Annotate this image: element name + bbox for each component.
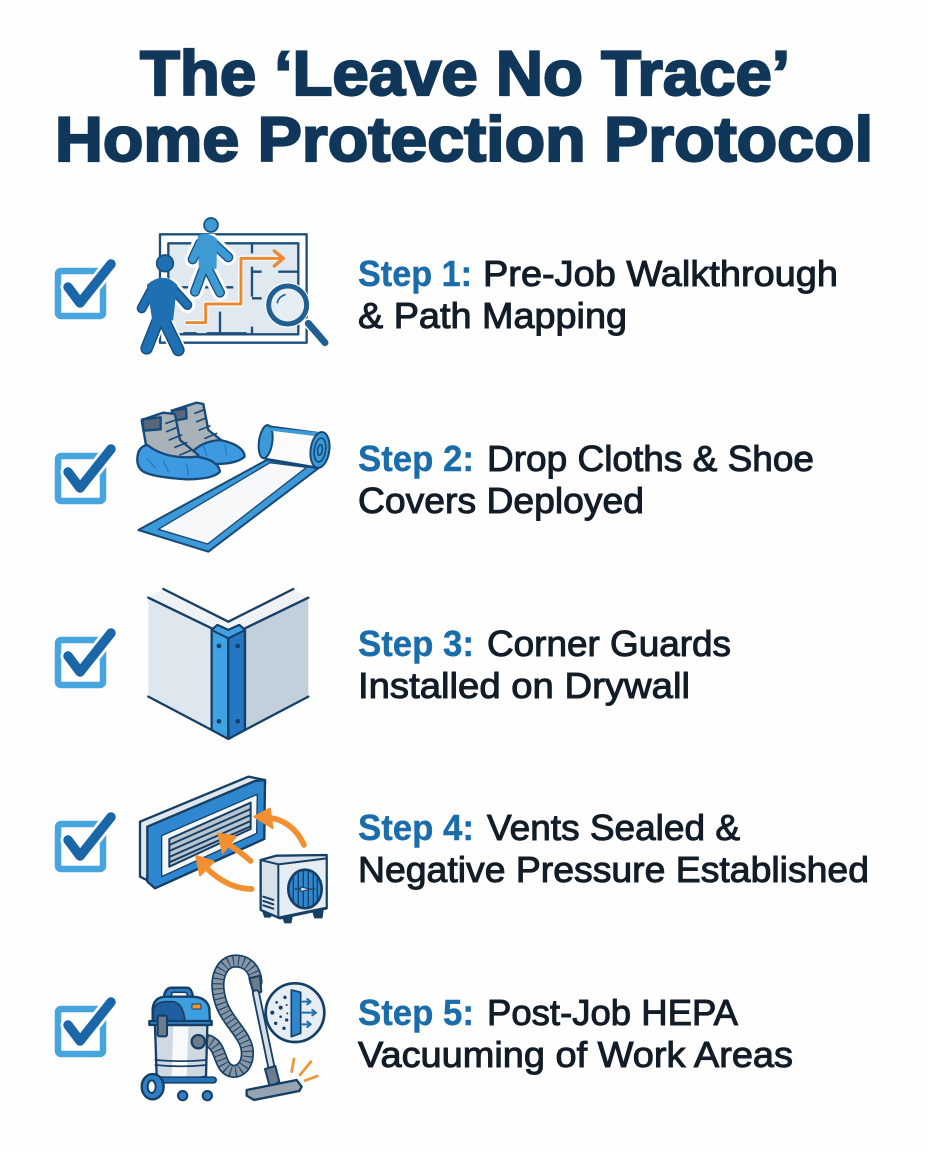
step 2 text: Step 2:	[358, 438, 474, 479]
step 3 row	[58, 589, 731, 739]
icon: shoe covers and drop cloth roll	[137, 403, 332, 552]
step 4 text: Vents Sealed &	[487, 807, 740, 848]
step 1 text: Pre-Job Walkthrough	[483, 253, 838, 294]
step 5 text	[358, 992, 793, 1075]
step 2 text: Drop Cloths & Shoe	[487, 438, 814, 479]
step 3 text: Corner Guards	[487, 623, 731, 664]
icon: checkbox step 3	[58, 633, 111, 685]
icon: walkthrough floor plan	[142, 218, 325, 350]
icon: checkbox step 5	[58, 1002, 111, 1054]
title: Home Protection Protocol	[55, 105, 873, 175]
step 2 text: Covers Deployed	[358, 480, 644, 521]
step 2 row	[58, 403, 814, 552]
icon: sealed vent and negative air machine	[140, 777, 327, 922]
title: The ‘Leave No Trace’	[140, 39, 790, 109]
step 3 text: Installed on Drywall	[358, 665, 690, 706]
step 5 text: Step 5:	[358, 992, 474, 1033]
step 1 text: & Path Mapping	[358, 295, 627, 336]
step 2 text	[358, 438, 814, 521]
step 4 row	[58, 777, 869, 922]
icon: checkbox step 4	[58, 817, 111, 869]
icon: checkbox step 1	[58, 264, 111, 316]
icon: checkbox step 2	[58, 449, 111, 501]
step 3 text: Step 3:	[358, 623, 474, 664]
step 5 text: Post-Job HEPA	[487, 992, 738, 1033]
step 4 text: Negative Pressure Established	[358, 849, 869, 890]
step 1 text: Step 1:	[358, 253, 472, 294]
step 3 text	[358, 623, 731, 706]
icon: HEPA vacuum	[142, 961, 324, 1100]
step 4 text: Step 4:	[358, 807, 474, 848]
step 4 text	[358, 807, 869, 890]
step 5 text: Vacuuming of Work Areas	[358, 1034, 793, 1075]
icon: drywall corner guard	[148, 589, 308, 739]
step 1 text	[358, 253, 838, 336]
title	[55, 39, 873, 175]
step 1 row	[58, 218, 838, 350]
step 5 row	[58, 961, 793, 1100]
